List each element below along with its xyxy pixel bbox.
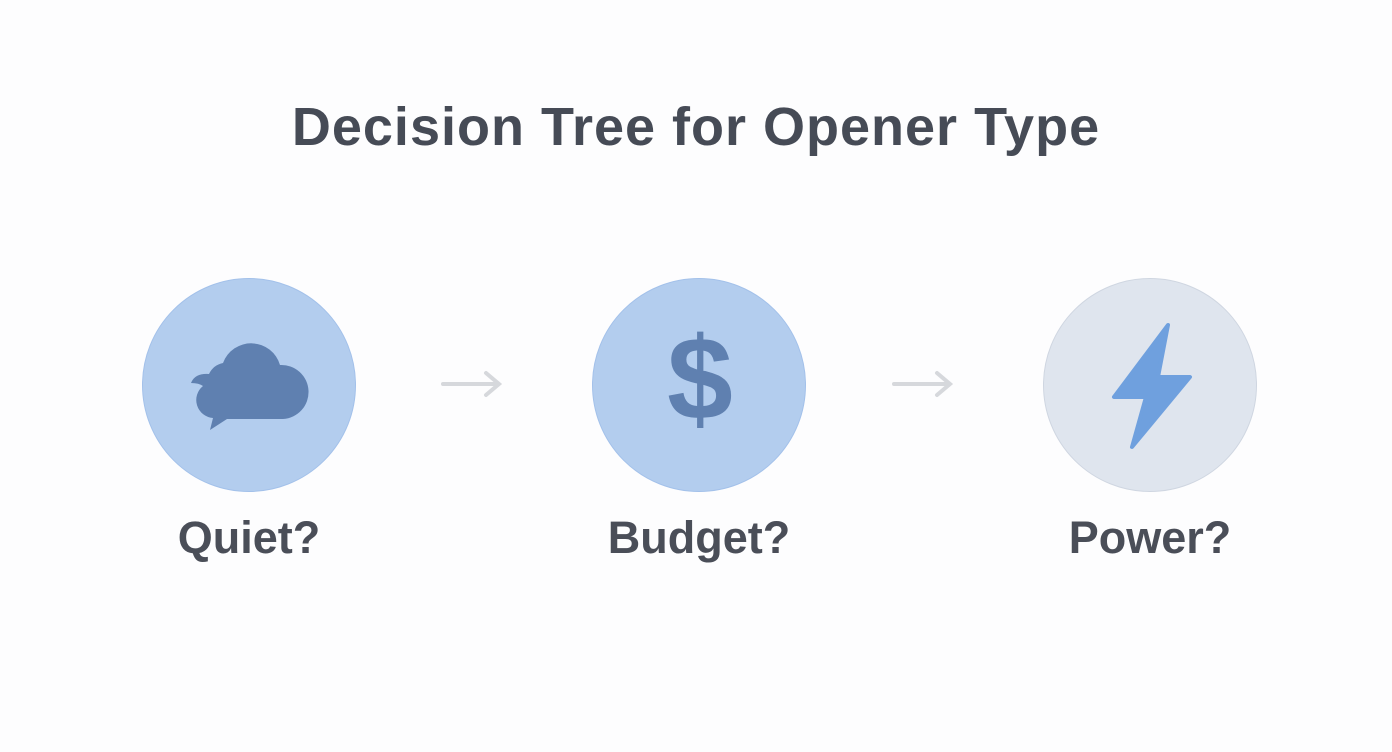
icon circle: cloud [142, 278, 356, 492]
step: quiet [142, 278, 356, 563]
arrow 1 [441, 371, 502, 397]
label: power: Power? [1069, 512, 1231, 563]
label: quiet: Quiet? [178, 512, 320, 563]
icon circle: dollar: $ [667, 313, 733, 445]
step: budget [592, 278, 806, 563]
icon circle: lightning [1043, 278, 1257, 492]
label: budget: Budget? [608, 512, 790, 563]
arrow 2 [892, 371, 953, 397]
step: power [1043, 278, 1257, 563]
title: Decision Tree for Opener Type [292, 97, 1100, 157]
icon circle: dollar [592, 278, 806, 492]
